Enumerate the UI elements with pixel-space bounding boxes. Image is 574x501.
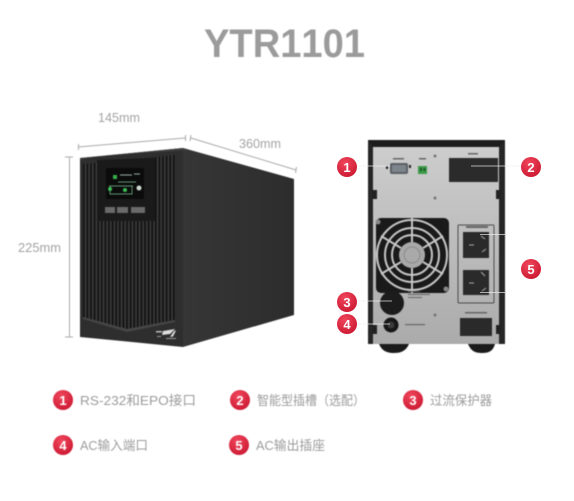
- LCD screen: [106, 168, 144, 199]
- dimension: width 145mm: 145mm: [98, 110, 140, 125]
- callout badge 1: 1: [343, 160, 351, 175]
- callout badge 4: 4: [343, 317, 351, 332]
- legend item 2: [230, 390, 365, 410]
- legend item 5: AC输出插座: [256, 438, 325, 453]
- cooling fan: [376, 218, 449, 293]
- dimension: depth 360mm: [190, 135, 296, 173]
- callout badge 2: [521, 157, 541, 177]
- callout badge 5: 5: [527, 262, 535, 277]
- overcurrent protector: [380, 291, 430, 315]
- legend item 4: AC输入端口: [80, 438, 148, 453]
- legend item 5: 5: [235, 438, 243, 453]
- rear gray panel: [373, 147, 499, 344]
- callout badge 2: 2: [527, 160, 535, 175]
- legend item 1: RS-232和EPO接口: [80, 393, 196, 408]
- callout badge 5: [521, 259, 541, 279]
- title: YTR1101: [204, 22, 365, 66]
- rear feet: [379, 344, 495, 353]
- legend item 2: 智能型插槽（选配）: [257, 393, 365, 408]
- legend item 3: [403, 390, 492, 410]
- front UPS product image: [80, 148, 294, 347]
- leader lines: [355, 166, 522, 324]
- UPS side panel: [183, 148, 294, 347]
- RS-232 port: [386, 158, 411, 174]
- screws: [434, 154, 436, 316]
- dimension: depth 360mm: 360mm: [239, 136, 281, 151]
- brand logo: [156, 329, 176, 339]
- smart slot: [449, 153, 498, 182]
- panel buttons: [105, 207, 145, 213]
- dimension: height 225mm: 225mm: [18, 240, 61, 255]
- callout badge 3: [337, 292, 357, 312]
- legend item 3: 过流保护器: [430, 393, 492, 408]
- AC inlet: [460, 312, 492, 336]
- EPO connector: [418, 158, 427, 174]
- rear UPS product image: [368, 140, 505, 353]
- legend item 3: 3: [409, 393, 417, 408]
- front vents: [83, 155, 175, 329]
- callout badge 1: [337, 157, 357, 177]
- callout badge 4: [337, 314, 357, 334]
- dimension: width 145mm: [78, 110, 186, 150]
- legend item 4: 4: [59, 438, 67, 453]
- AC output sockets: [458, 225, 494, 303]
- legend item 2: 2: [236, 393, 244, 408]
- rear housing: [368, 140, 505, 344]
- callout badge 3: 3: [343, 295, 351, 310]
- AC input port: [384, 318, 425, 332]
- legend item 4: [53, 435, 148, 455]
- legend item 5: [229, 435, 325, 455]
- control panel: [97, 158, 155, 221]
- legend item 1: 1: [59, 393, 67, 408]
- UPS front face: [80, 148, 183, 347]
- legend item 1: [53, 390, 196, 410]
